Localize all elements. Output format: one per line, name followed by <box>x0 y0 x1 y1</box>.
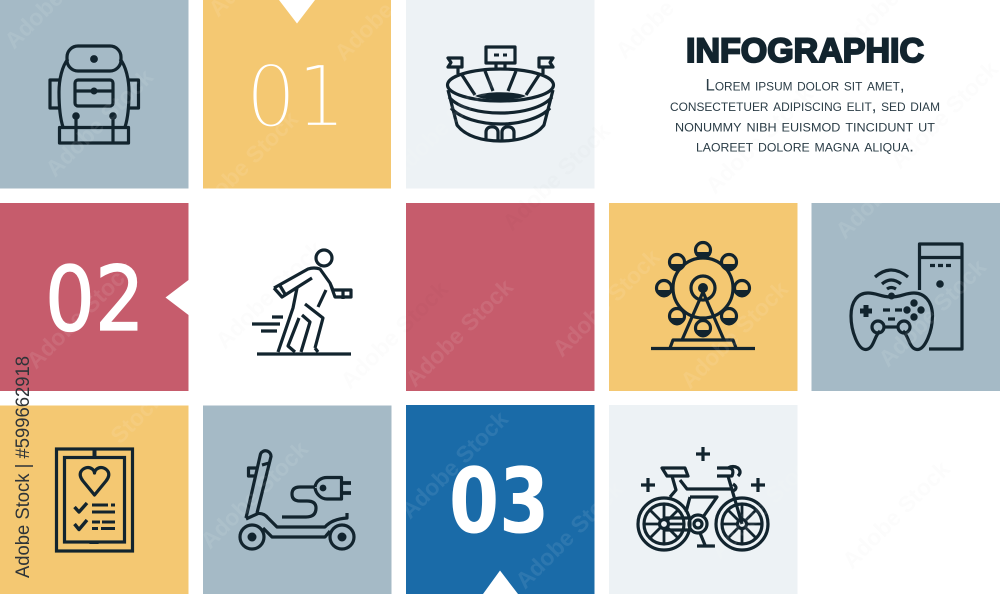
panel: game controller tile <box>812 203 1000 391</box>
text: Adobe Stock <box>21 256 139 374</box>
icon: bicycle <box>638 447 768 550</box>
text: Adobe Stock <box>873 254 991 372</box>
number 01: 01 <box>246 45 346 149</box>
number 03: 03 <box>449 449 549 554</box>
text block: lorem ipsum: nonummy nibh euismod tincidunt ut <box>675 116 936 136</box>
text block: lorem ipsum <box>670 76 940 156</box>
icon: electric scooter <box>240 451 354 549</box>
text: Adobe Stock <box>40 64 158 182</box>
text: Adobe Stock <box>510 476 628 594</box>
text: Adobe Stock <box>547 244 665 362</box>
panel: backpack tile <box>0 0 188 188</box>
text block: lorem ipsum: laoreet dolore magna aliqua. <box>696 136 914 156</box>
panel: scooter tile <box>203 406 392 594</box>
panel: number 03 tile <box>406 405 594 594</box>
panel: number 01 tile <box>203 0 391 188</box>
watermark: stock id: Adobe Stock | #599662918 <box>13 356 34 578</box>
text: Adobe Stock <box>400 274 518 392</box>
text: Stock <box>105 386 168 449</box>
panel: ferris wheel tile <box>609 203 798 391</box>
cabins <box>656 242 750 338</box>
panel: tablet tile <box>0 406 188 594</box>
panel: bicycle tile <box>609 405 798 594</box>
panel: stadium tile <box>406 0 594 188</box>
icon: ferris wheel <box>651 242 755 348</box>
text block: lorem ipsum: Lorem ipsum dolor sit amet, <box>706 76 904 94</box>
icon: person running <box>252 250 351 354</box>
text block: lorem ipsum: consectetuer adipiscing elit, sed diam <box>670 96 940 115</box>
text: Adobe Stock <box>705 446 823 564</box>
icon: game controller and computer <box>851 244 962 350</box>
number 02: 02 <box>45 247 145 351</box>
icon: tablet with heart checklist <box>56 449 132 551</box>
icon: backpack <box>50 46 138 143</box>
text: Adobe Stock <box>675 276 793 394</box>
title: INFOGRAPHIC <box>686 32 924 70</box>
text: Adobe Stock <box>185 106 303 224</box>
text: Adobe Stock <box>385 66 503 184</box>
text: Adobe Stock <box>195 436 313 554</box>
text: Adobe Stock <box>395 406 513 524</box>
icon: stadium <box>448 47 554 141</box>
text: Adobe Stock <box>830 126 948 244</box>
panel: number 02 tile <box>0 203 188 391</box>
panel: red blank tile <box>406 203 594 391</box>
